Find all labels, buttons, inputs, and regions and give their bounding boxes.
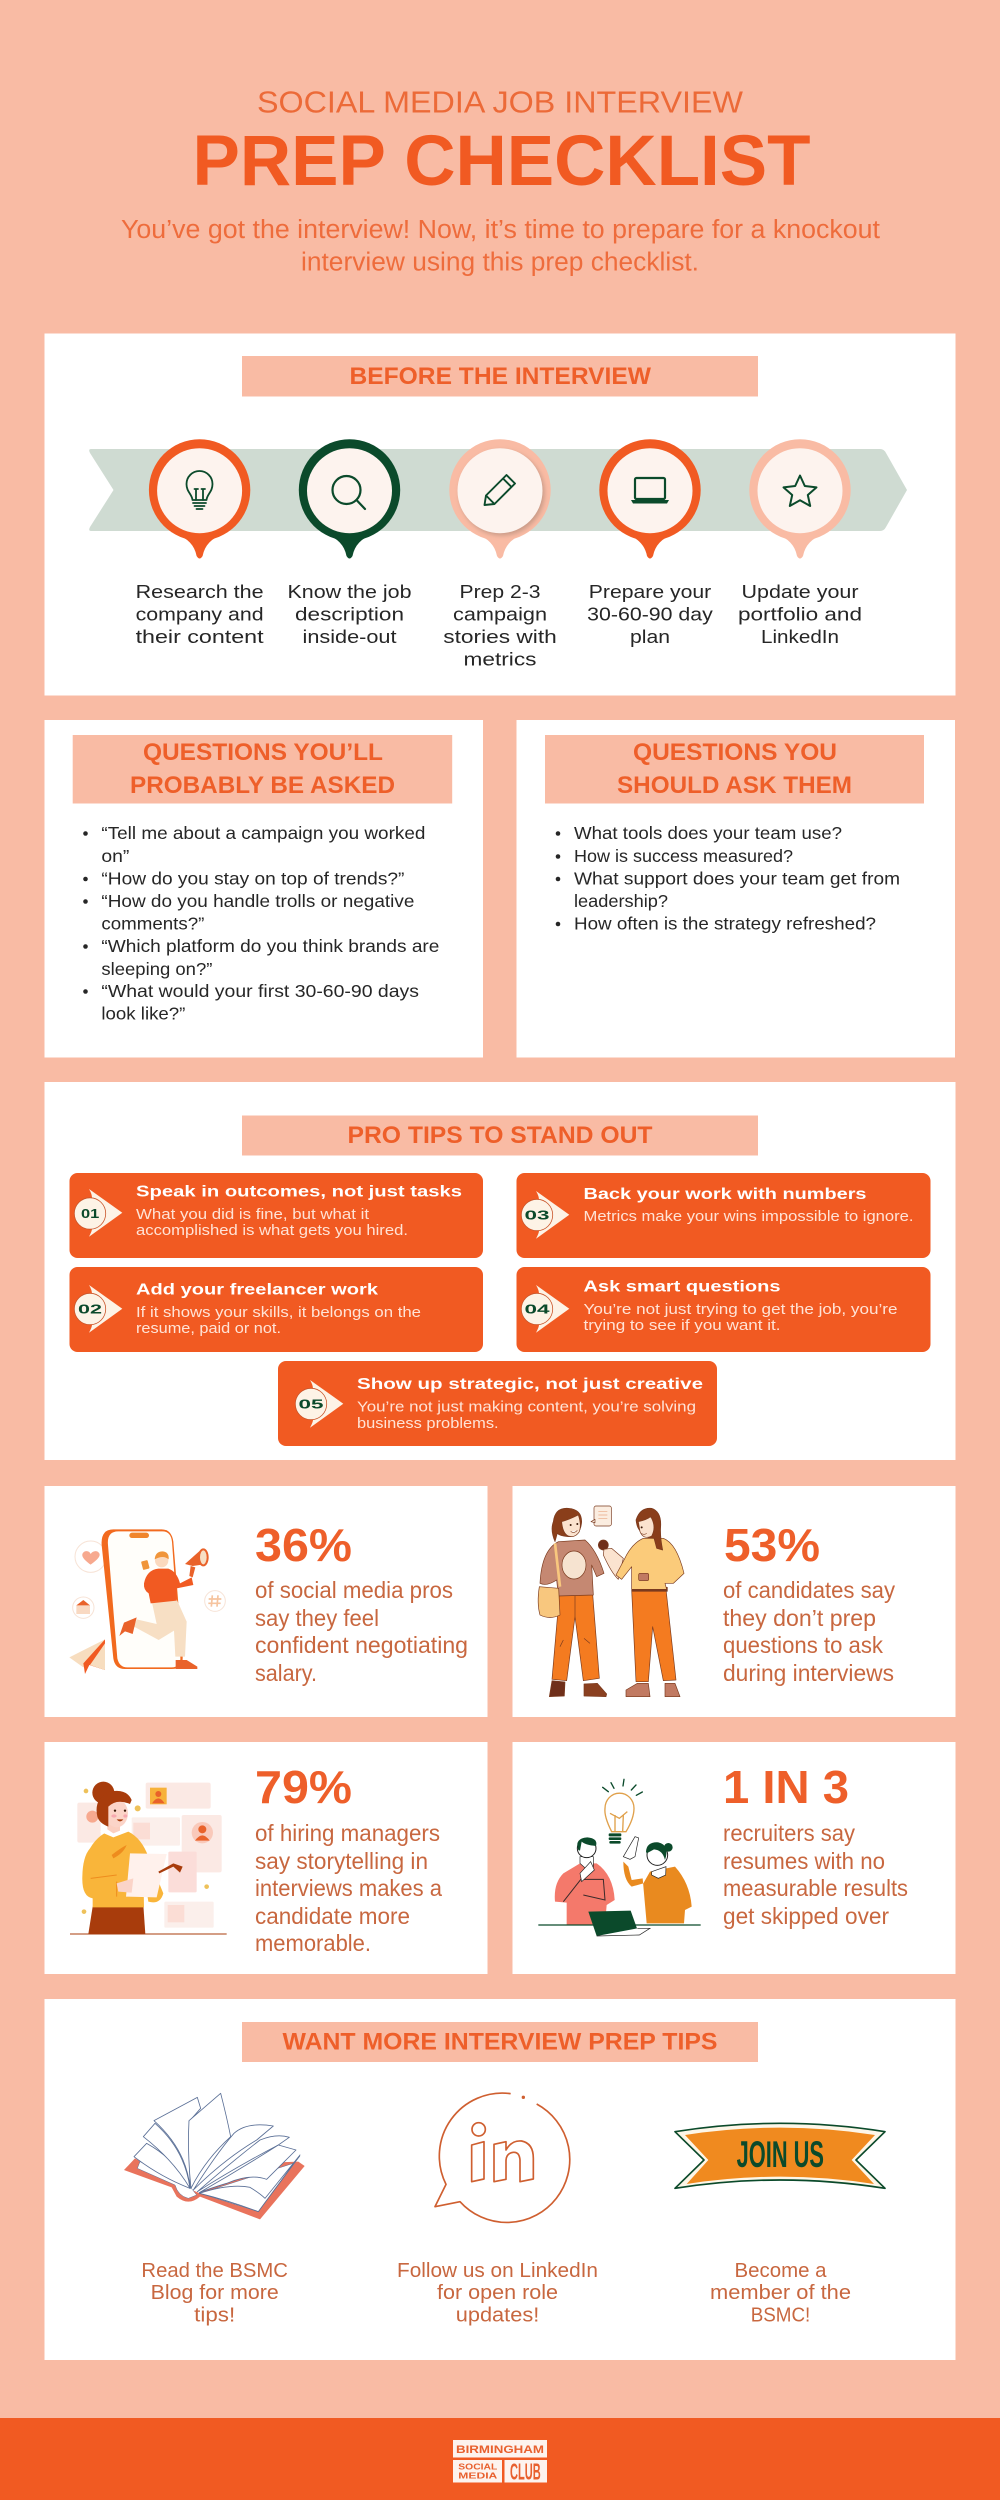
tip 04: trying to see if you want it. bbox=[584, 1318, 780, 1334]
badge 02: 02 bbox=[78, 1302, 102, 1316]
step labels: description bbox=[295, 604, 404, 624]
question list: How often is the strategy refreshed? bbox=[574, 914, 876, 934]
tip 05 bbox=[278, 1361, 717, 1446]
tip 04: Ask smart questions bbox=[584, 1278, 781, 1296]
heading: want more interview prep tips bbox=[242, 2022, 758, 2062]
question list: look like?” bbox=[101, 1004, 186, 1024]
step labels: inside-out bbox=[302, 626, 396, 647]
step labels: Update your bbox=[742, 581, 858, 602]
panel: questions you should ask bbox=[516, 720, 955, 1058]
question list: How is success measured? bbox=[574, 846, 793, 866]
icon: laptop bbox=[631, 478, 669, 504]
call to action text: member of the bbox=[710, 2282, 851, 2304]
question list: “How do you handle trolls or negative bbox=[101, 891, 414, 911]
heading: pro tips to stand out: PRO TIPS TO STAND OUT bbox=[348, 1122, 653, 1149]
stat description: say storytelling in bbox=[255, 1848, 428, 1874]
question list bbox=[83, 823, 439, 1024]
heading: questions you'll probably be asked bbox=[73, 735, 452, 804]
heading: before the interview: BEFORE THE INTERVIEW bbox=[350, 363, 651, 390]
tip 01: accomplished is what gets you hired. bbox=[136, 1223, 408, 1239]
logo: birmingham social media club bbox=[453, 2440, 547, 2484]
tip 03 bbox=[516, 1173, 930, 1258]
stat description: of social media pros bbox=[255, 1577, 453, 1603]
step labels: Prepare your bbox=[589, 581, 711, 602]
subtitle: You’ve got the interview! Now, it’s time to prepare for a knockout bbox=[121, 216, 880, 244]
panel: questions you'll be asked bbox=[44, 720, 483, 1058]
badge 05 bbox=[295, 1380, 343, 1428]
stat description: of hiring managers bbox=[255, 1820, 440, 1846]
badge 03 bbox=[521, 1191, 569, 1239]
logo: birmingham social media club: SOCIAL bbox=[458, 2462, 497, 2472]
call to action text: Become a bbox=[734, 2260, 827, 2282]
title block bbox=[121, 86, 880, 276]
illustration: two people with idea bulb bbox=[538, 1779, 701, 1936]
step labels: LinkedIn bbox=[761, 626, 839, 647]
illustration: phone and megaphone person bbox=[69, 1529, 225, 1674]
stat description: measurable results bbox=[723, 1875, 908, 1901]
tip 02: resume, paid or not. bbox=[136, 1321, 281, 1337]
heading: want more interview prep tips: WANT MORE INTERVIEW PREP TIPS bbox=[282, 2028, 718, 2056]
question list: “Tell me about a campaign you worked bbox=[101, 823, 425, 843]
icon: star bbox=[784, 476, 816, 506]
question list: What tools does your team use? bbox=[574, 823, 842, 843]
icon: join us ribbon: JOIN US bbox=[737, 2134, 824, 2175]
step labels: Know the job bbox=[288, 581, 412, 602]
tip 05: business problems. bbox=[357, 1416, 499, 1432]
stat description bbox=[723, 1577, 895, 1686]
heading: questions you should ask them: QUESTIONS YOU bbox=[633, 739, 837, 766]
question list: on” bbox=[101, 846, 130, 866]
badge 01 bbox=[74, 1189, 122, 1237]
heading: questions you'll probably be asked: QUESTIONS YOU’LL bbox=[143, 739, 383, 766]
question list: leadership? bbox=[574, 891, 668, 911]
badge 02 bbox=[74, 1285, 122, 1333]
call to action text: tips! bbox=[194, 2304, 235, 2326]
pin 5: star bbox=[749, 439, 851, 558]
icon: linkedin speech bubble bbox=[435, 2093, 570, 2222]
tip 01 bbox=[70, 1173, 483, 1258]
heading: questions you should ask them bbox=[545, 735, 924, 804]
stat description: salary. bbox=[255, 1660, 317, 1686]
badge 04: 04 bbox=[524, 1302, 551, 1316]
step labels: Research the bbox=[136, 581, 264, 602]
question list: “What would your first 30-60-90 days bbox=[101, 981, 419, 1001]
stat description: memorable. bbox=[255, 1930, 371, 1956]
tip 01: What you did is fine, but what it bbox=[136, 1207, 369, 1223]
call to action text: BSMC! bbox=[751, 2304, 810, 2326]
stat description: of candidates say bbox=[723, 1577, 895, 1603]
step labels: portfolio and bbox=[738, 604, 862, 624]
icon: open book bbox=[124, 2093, 305, 2219]
tip 04: You’re not just trying to get the job, you’re bbox=[584, 1302, 898, 1318]
tip 05: Show up strategic, not just creative bbox=[357, 1376, 703, 1393]
call to action text bbox=[141, 2260, 851, 2326]
question list bbox=[556, 823, 900, 934]
call to action text: Follow us on LinkedIn bbox=[397, 2260, 598, 2282]
step labels: company and bbox=[136, 604, 264, 624]
tip 03: Metrics make your wins impossible to ignore. bbox=[584, 1209, 914, 1225]
illustration: woman with resume bbox=[70, 1782, 227, 1934]
subtitle: interview using this prep checklist. bbox=[301, 248, 699, 276]
step labels: metrics bbox=[464, 648, 536, 670]
question list: What support does your team get from bbox=[574, 869, 900, 889]
step labels: their content bbox=[136, 626, 264, 647]
panel: before the interview bbox=[44, 334, 956, 696]
tip 03: Back your work with numbers bbox=[584, 1186, 867, 1203]
kicker: SOCIAL MEDIA JOB INTERVIEW bbox=[257, 86, 743, 120]
stat card: 53% bbox=[512, 1486, 956, 1717]
pin 1: lightbulb bbox=[149, 439, 250, 558]
question list: comments?” bbox=[101, 914, 205, 934]
call to action text: Read the BSMC bbox=[141, 2260, 288, 2282]
subtitle bbox=[121, 216, 880, 276]
badge 01: 01 bbox=[81, 1206, 99, 1221]
badge 03: 03 bbox=[524, 1208, 550, 1222]
stat description bbox=[723, 1820, 908, 1929]
stat value: 1 IN 3 bbox=[723, 1761, 849, 1813]
stat value: 36% bbox=[255, 1519, 352, 1571]
question list: “How do you stay on top of trends?” bbox=[101, 869, 405, 889]
stat card: 79% bbox=[44, 1742, 488, 1974]
stat description: recruiters say bbox=[723, 1820, 855, 1846]
heading: questions you'll probably be asked: PROBABLY BE ASKED bbox=[130, 772, 395, 799]
stat description: get skipped over bbox=[723, 1903, 889, 1929]
stat description: resumes with no bbox=[723, 1848, 885, 1874]
stat description: they don’t prep bbox=[723, 1605, 876, 1631]
tip 01: Speak in outcomes, not just tasks bbox=[136, 1184, 462, 1200]
arrow ribbon bbox=[89, 449, 907, 531]
footer band bbox=[0, 2418, 1000, 2500]
stat description bbox=[255, 1577, 468, 1686]
stat description: say they feel bbox=[255, 1605, 379, 1631]
question list: sleeping on?” bbox=[101, 959, 213, 979]
pin 2: magnifier bbox=[299, 439, 400, 558]
tip 02: If it shows your skills, it belongs on the bbox=[136, 1305, 421, 1321]
tip 04 bbox=[516, 1267, 930, 1352]
question list: “Which platform do you think brands are bbox=[101, 936, 439, 956]
stat description bbox=[255, 1820, 442, 1956]
heading: pro tips to stand out bbox=[242, 1116, 758, 1156]
stat description: during interviews bbox=[723, 1660, 894, 1686]
stat card: 36% bbox=[44, 1486, 488, 1717]
tip 02 bbox=[70, 1267, 483, 1352]
icon: pencil bbox=[484, 475, 515, 505]
heading: before the interview bbox=[242, 356, 758, 396]
stat description: confident negotiating bbox=[255, 1632, 468, 1658]
step labels bbox=[136, 581, 862, 670]
logo: birmingham social media club: MEDIA bbox=[458, 2470, 497, 2480]
stat value: 53% bbox=[724, 1519, 820, 1571]
step labels: Prep 2-3 bbox=[460, 581, 540, 602]
pin 3: pencil bbox=[449, 439, 551, 558]
call to action text: for open role bbox=[437, 2282, 558, 2304]
illustration: two people talking bbox=[538, 1506, 684, 1697]
tip 05: You’re not just making content, you’re solving bbox=[357, 1400, 696, 1416]
call to action text: Blog for more bbox=[151, 2282, 279, 2304]
icon: lightbulb bbox=[186, 471, 212, 509]
panel: want more tips bbox=[44, 1999, 956, 2360]
heading: questions you should ask them: SHOULD ASK THEM bbox=[617, 772, 852, 799]
icon: magnifier bbox=[332, 476, 365, 509]
pin 4: laptop bbox=[599, 439, 701, 558]
stat description: questions to ask bbox=[723, 1632, 883, 1658]
stat value: 79% bbox=[255, 1761, 352, 1813]
logo: birmingham social media club: CLUB bbox=[510, 2458, 541, 2484]
tip 02: Add your freelancer work bbox=[136, 1282, 378, 1298]
icon: join us ribbon bbox=[675, 2123, 885, 2188]
step labels: campaign bbox=[453, 604, 547, 624]
badge 05: 05 bbox=[298, 1396, 324, 1412]
stat description: interviews makes a bbox=[255, 1875, 442, 1901]
step labels: stories with bbox=[443, 626, 557, 647]
panel: pro tips bbox=[44, 1082, 956, 1460]
badge 04 bbox=[521, 1285, 569, 1333]
stat description: candidate more bbox=[255, 1903, 410, 1929]
call to action text: updates! bbox=[456, 2304, 539, 2326]
logo: birmingham social media club: BIRMINGHAM bbox=[456, 2444, 544, 2456]
stat card: 1 in 3 bbox=[512, 1742, 956, 1974]
step labels: plan bbox=[630, 626, 670, 647]
main title: PREP CHECKLIST bbox=[192, 122, 810, 201]
step labels: 30-60-90 day bbox=[587, 604, 714, 624]
